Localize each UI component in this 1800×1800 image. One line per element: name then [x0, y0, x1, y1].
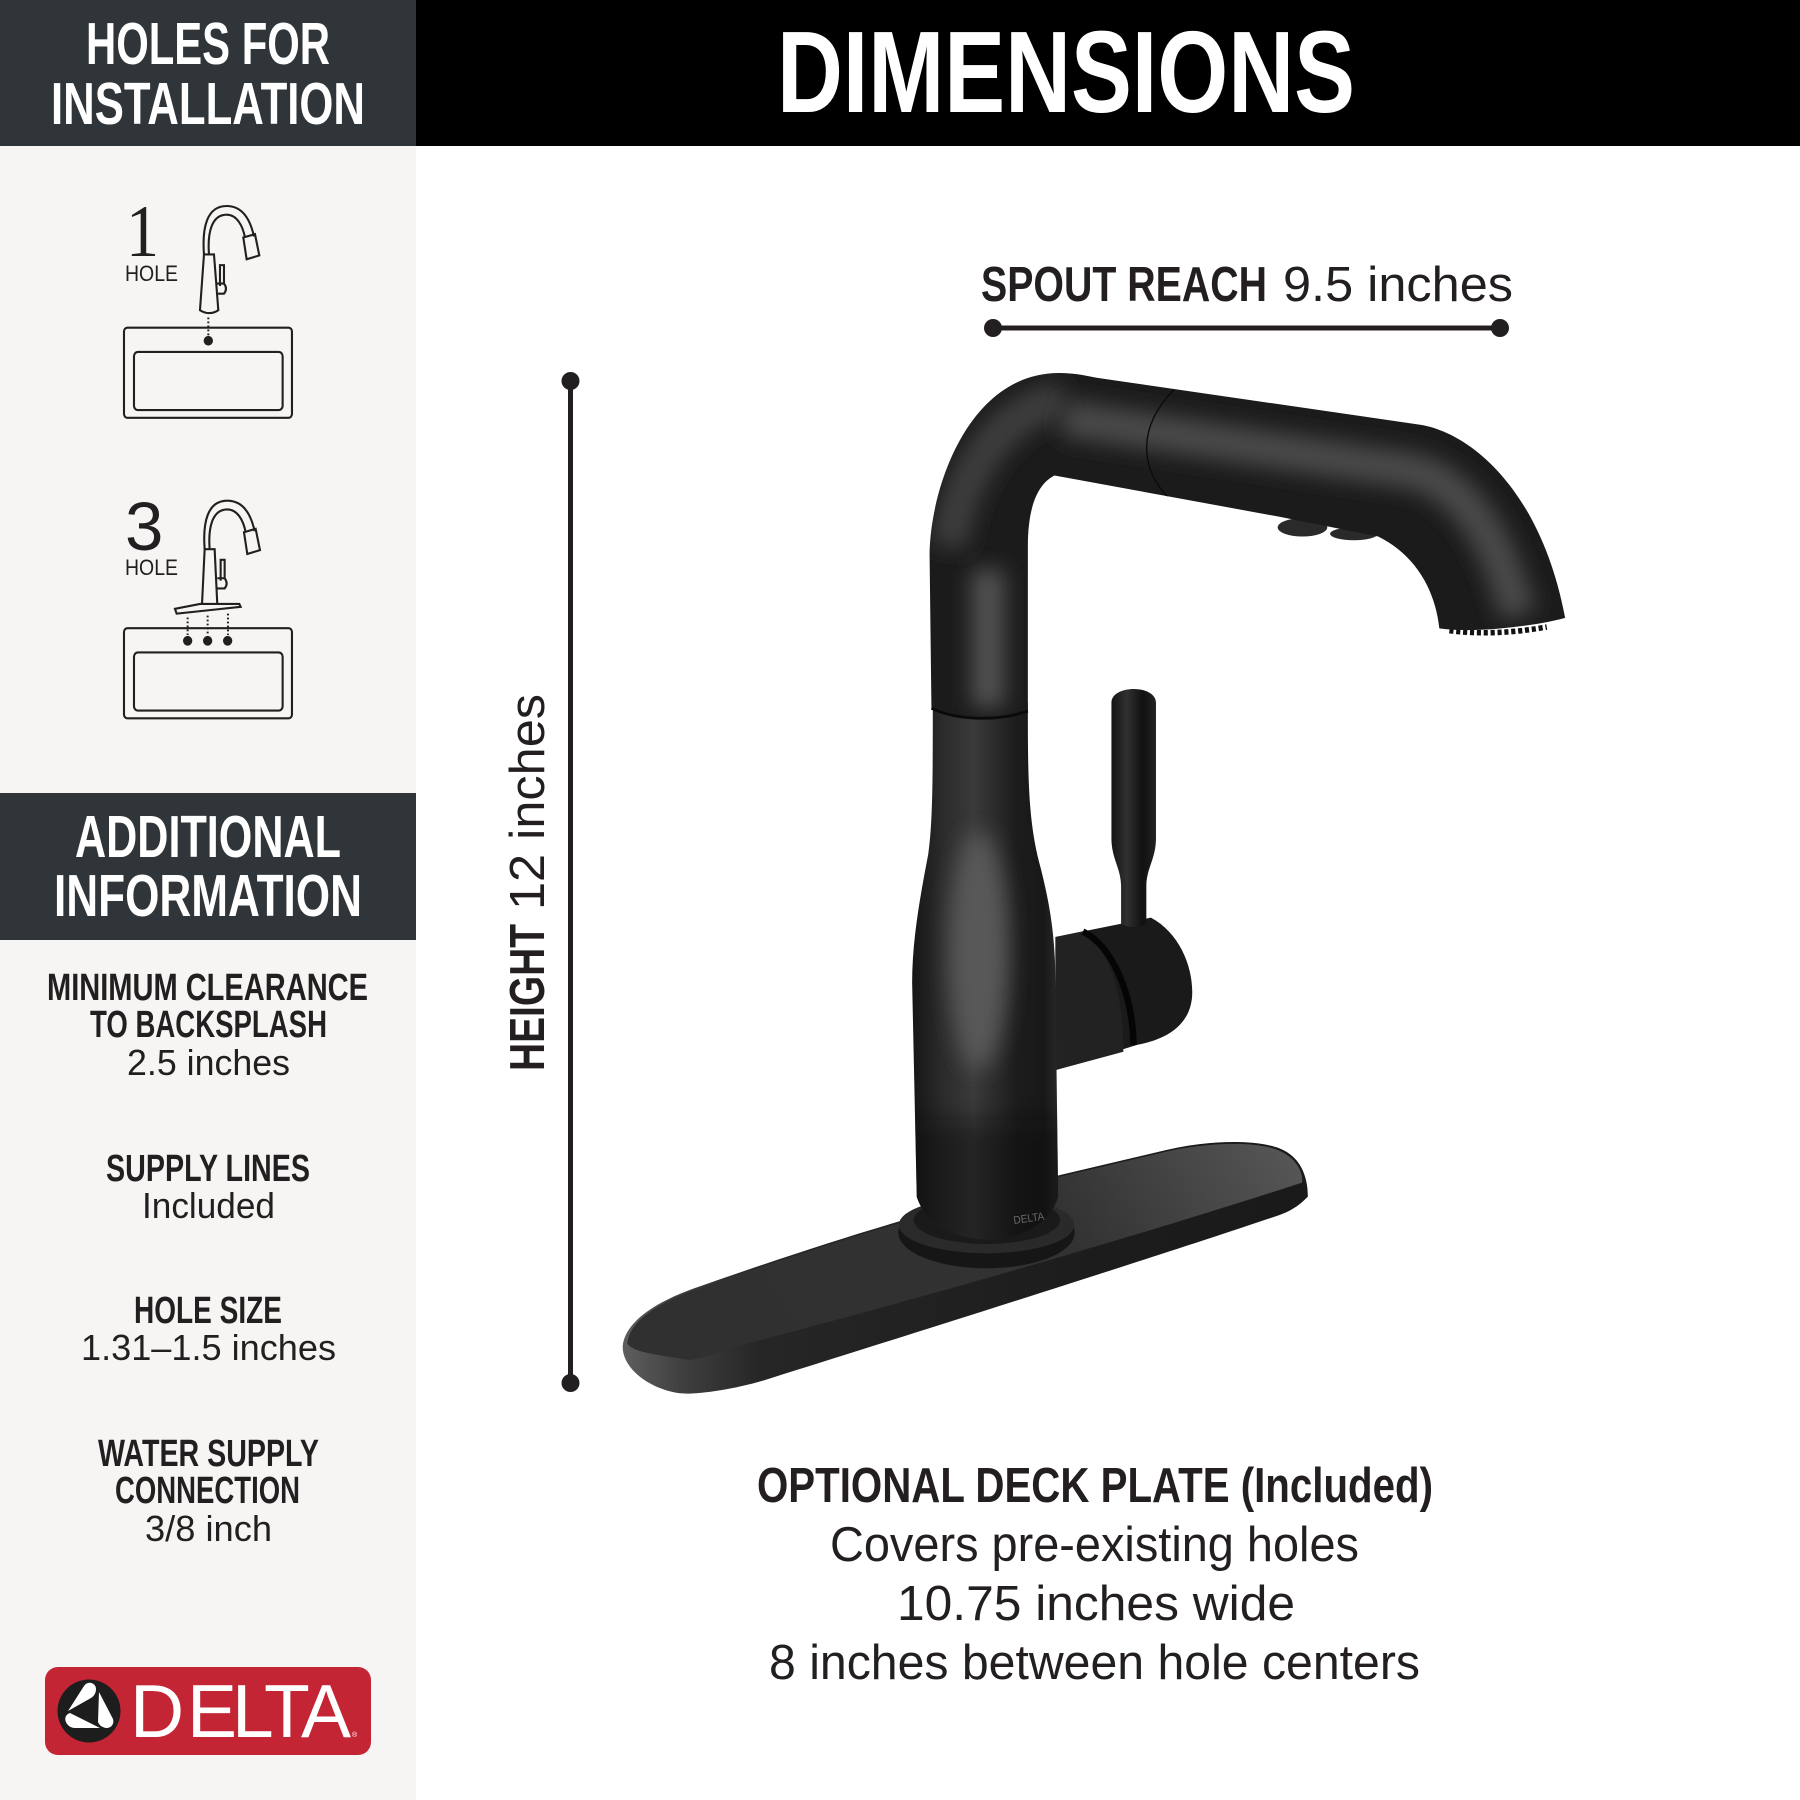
- dimension: spout reach: SPOUT REACH: [981, 258, 1267, 312]
- logo: delta: L: [232, 1669, 274, 1753]
- deck plate: [623, 1142, 1308, 1394]
- faucet body: [912, 702, 1058, 1239]
- text block: minimum clearance: MINIMUM CLEARANCE: [47, 967, 368, 1009]
- logo: delta: D: [130, 1669, 184, 1753]
- icon: three hole sink and faucet: [124, 488, 292, 718]
- icon: one hole sink and faucet: HOLE: [125, 261, 178, 286]
- text block: supply lines: Included: [142, 1185, 275, 1226]
- icon: three hole sink and faucet: 3: [125, 488, 163, 565]
- text block: water supply connection: CONNECTION: [115, 1470, 300, 1512]
- text block: optional deck plate: [757, 1459, 1433, 1690]
- heading: holes for installation: INSTALLATION: [51, 71, 365, 137]
- text block: water supply connection: 3/8 inch: [145, 1508, 272, 1549]
- heading: additional information: INFORMATION: [54, 863, 362, 929]
- icon: one hole sink and faucet: 1: [126, 191, 159, 273]
- dimension: height: [501, 372, 580, 1392]
- text block: optional deck plate: 10.75 inches wide: [897, 1577, 1295, 1631]
- text block: hole size: [81, 1290, 336, 1368]
- text block: minimum clearance: TO BACKSPLASH: [90, 1004, 327, 1046]
- text block: water supply connection: WATER SUPPLY: [98, 1433, 319, 1475]
- text block: minimum clearance: 2.5 inches: [127, 1042, 290, 1083]
- base ring: [898, 1196, 1075, 1268]
- dimension: height: 12 inches: [501, 694, 555, 910]
- title bar: dimensions: DIMENSIONS: [777, 7, 1355, 137]
- logo: delta: A: [301, 1669, 351, 1753]
- text block: minimum clearance: [47, 967, 368, 1083]
- logo: delta: [45, 1667, 371, 1755]
- text block: optional deck plate: OPTIONAL DECK PLATE (Included): [757, 1459, 1433, 1513]
- lever handle and hub: [1055, 689, 1192, 1070]
- spout: [930, 373, 1565, 718]
- text block: water supply connection: [98, 1433, 319, 1549]
- panel: left sidebar: [0, 0, 416, 1800]
- heading: holes for installation: HOLES FOR: [86, 11, 330, 77]
- heading: additional information: ADDITIONAL: [75, 804, 341, 870]
- heading: additional information: [0, 793, 416, 940]
- icon: one hole sink and faucet: [124, 191, 292, 418]
- faucet illustration: [623, 373, 1565, 1394]
- dimension: height: HEIGHT: [501, 924, 555, 1071]
- text block: optional deck plate: Covers pre-existing holes: [830, 1518, 1359, 1572]
- dimension: spout reach: [981, 258, 1513, 337]
- text block: hole size: HOLE SIZE: [134, 1290, 282, 1332]
- text block: supply lines: [106, 1148, 310, 1226]
- icon: three hole sink and faucet: HOLE: [125, 555, 178, 580]
- logo: delta: T: [264, 1669, 310, 1753]
- text block: supply lines: SUPPLY LINES: [106, 1148, 310, 1190]
- dimension: spout reach: 9.5 inches: [1283, 258, 1513, 312]
- delta mark on base: DELTA: [1013, 1211, 1046, 1227]
- text block: optional deck plate: 8 inches between hole centers: [769, 1636, 1420, 1690]
- heading: holes for installation: [0, 0, 416, 146]
- logo: delta: E: [187, 1669, 237, 1753]
- logo: delta: ®: [352, 1731, 358, 1739]
- title bar: dimensions: [416, 0, 1800, 146]
- text block: hole size: 1.31–1.5 inches: [81, 1327, 336, 1368]
